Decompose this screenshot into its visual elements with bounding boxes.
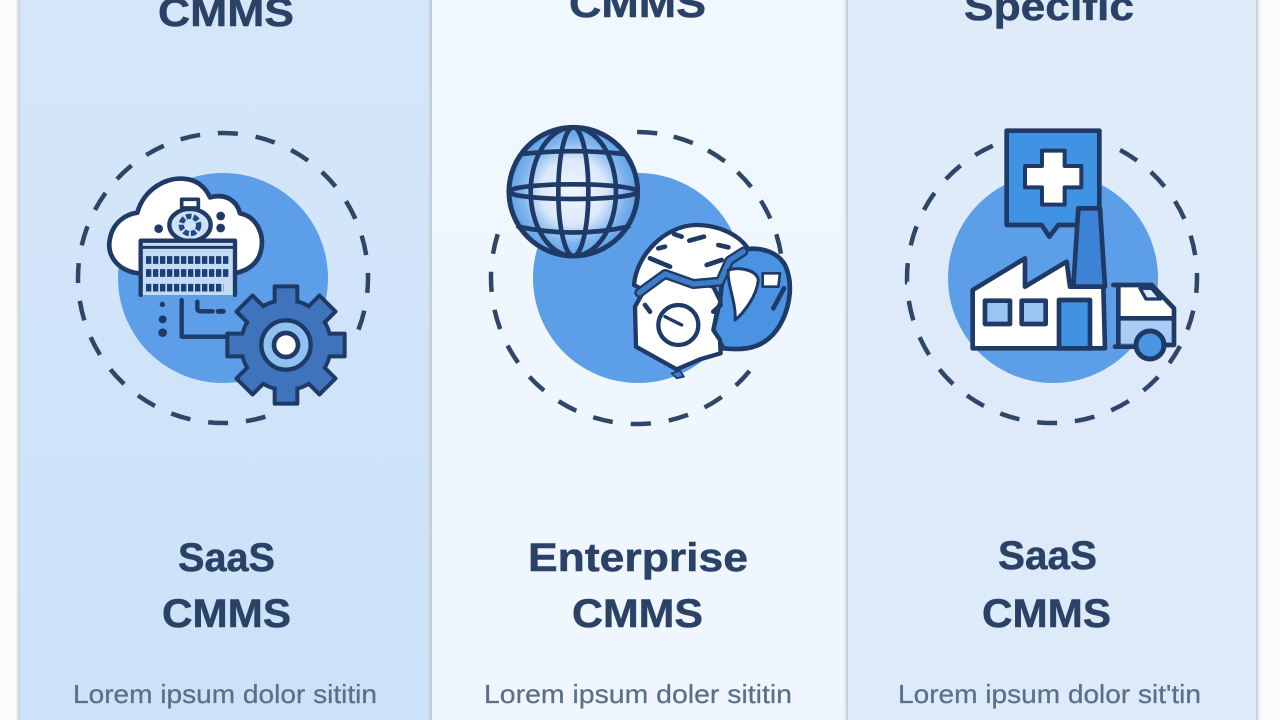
heading: SaaS CMMS: SaaS — [178, 536, 275, 580]
earth: ocean — [713, 249, 790, 349]
earth: coastline marks — [645, 234, 784, 312]
heading: SaaS CMMS — [162, 536, 291, 636]
blue circle — [118, 173, 328, 383]
factory — [973, 258, 1105, 348]
earth: continents — [728, 269, 758, 320]
medical sign — [1007, 131, 1099, 237]
icon: cloud, keyboard and gear — [109, 179, 345, 404]
keyboard — [141, 241, 235, 295]
panel: SaaS CMMS — [18, 0, 432, 720]
chimney — [1073, 208, 1105, 287]
dashed ring — [73, 128, 373, 428]
cloud — [109, 179, 262, 273]
connector lines — [182, 300, 233, 337]
heading: SaaS CMMS — [982, 534, 1111, 636]
dashed ring — [902, 128, 1202, 428]
connector dots — [158, 302, 167, 337]
earth: blue band — [639, 252, 743, 293]
earth — [634, 225, 790, 378]
panel: Enterprise CMMS — [430, 0, 849, 720]
icons: wireframe globe and earth — [509, 127, 790, 378]
heading: Enterprise CMMS — [528, 536, 748, 636]
description: Lorem ipsum dolor sititin — [73, 679, 377, 709]
wireframe globe — [509, 127, 638, 256]
truck — [1113, 285, 1174, 359]
heading: SaaS CMMS: SaaS — [998, 534, 1097, 578]
earth: lower land — [635, 275, 721, 369]
timer — [154, 199, 225, 241]
earth: upper land — [634, 225, 747, 290]
dashed ring — [431, 72, 843, 484]
icon: medical sign, factory and truck — [973, 131, 1174, 359]
heading: SaaS CMMS: CMMS — [162, 592, 291, 636]
blue circle — [948, 173, 1158, 383]
panel: Industry-specific SaaS CMMS — [846, 0, 1258, 720]
heading: Enterprise CMMS: Enterprise — [528, 536, 748, 580]
description: Lorem ipsum dolor sit'tin — [898, 679, 1201, 709]
description: Lorem ipsum doler sititin — [484, 679, 792, 709]
heading: SaaS CMMS: CMMS — [982, 592, 1111, 636]
blue circle — [533, 173, 743, 383]
earth: clock — [658, 305, 698, 345]
heading: Enterprise CMMS: CMMS — [572, 592, 703, 636]
gear — [227, 286, 345, 404]
